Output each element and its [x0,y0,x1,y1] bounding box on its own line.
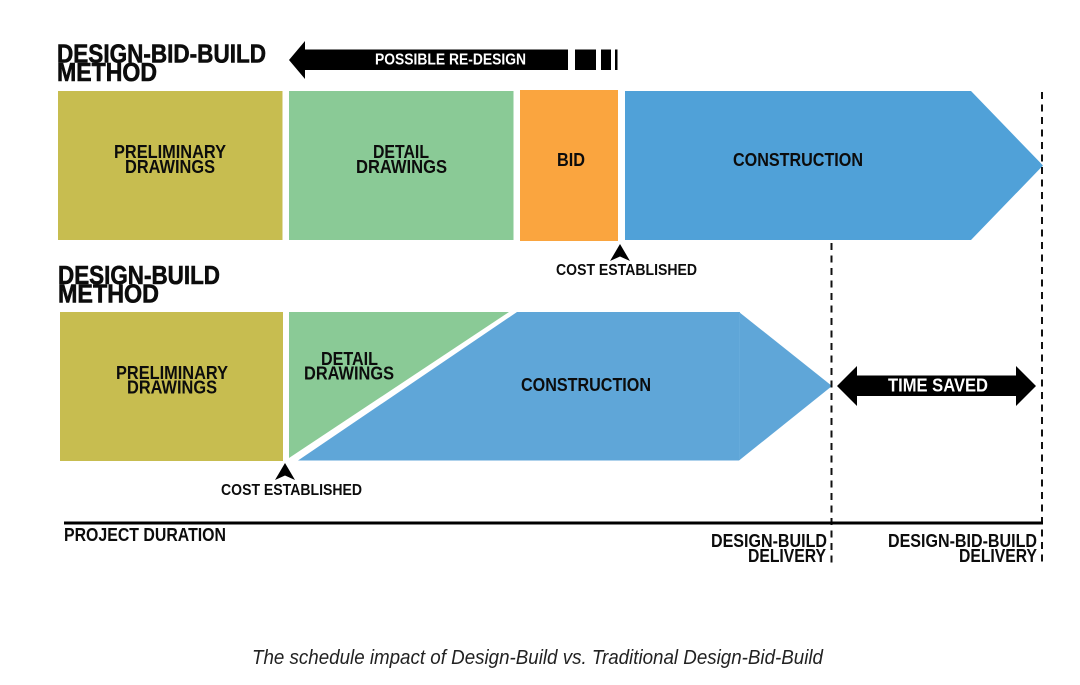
panel: preliminary drawings (design-build): DRAWINGS [127,378,217,398]
dashed line: design-build delivery [830,243,832,567]
arrow: time saved: TIME SAVED [888,376,988,396]
arrow: time saved [837,366,1036,406]
timeline axis [64,522,1043,524]
panel: construction (design-build): CONSTRUCTION [521,375,651,395]
heading: design-build method: DESIGN-BUILD [58,262,220,290]
arrow: possible re-design [289,41,618,79]
label: project duration: PROJECT DURATION [64,525,226,545]
panel: detail drawings (design-bid-build): DETAIL [373,142,429,162]
panel: preliminary drawings (design-build) [60,312,283,461]
label: design-build delivery: DESIGN-BUILD [711,531,827,551]
panel: bid: BID [557,150,585,170]
panel: bid [520,90,618,241]
panel: detail drawings (design-build): DRAWINGS [304,364,394,384]
panel: construction (design-bid-build): CONSTRUCTION [733,150,863,170]
panel: detail drawings (design-bid-build): DRAWINGS [356,157,447,177]
label: design-bid-build delivery: DESIGN-BID-BUILD [888,531,1037,551]
heading: design-bid-build method [57,40,266,87]
arrow: possible re-design: POSSIBLE RE-DESIGN [375,52,526,68]
caption: The schedule impact of Design-Build vs. Traditional Design-Bid-Build [252,647,824,669]
panel: detail drawings (design-build) [289,312,509,458]
heading: design-build method: METHOD [58,280,159,308]
panel: preliminary drawings (design-build): PRELIMINARY [116,363,228,383]
panel: detail drawings (design-build): DETAIL [321,349,378,369]
panel: preliminary drawings (design-bid-build) [58,91,282,240]
dashed line: design-bid-build delivery [1041,92,1043,567]
heading: design-bid-build method: DESIGN-BID-BUILD [57,40,266,68]
marker: cost established (design-bid-build) [556,244,697,279]
panel: construction (design-bid-build) [625,91,1043,240]
marker: cost established (design-build): COST ESTABLISHED [221,482,362,499]
panel: preliminary drawings (design-bid-build): DRAWINGS [125,157,215,177]
label: design-bid-build delivery: DELIVERY [959,546,1037,566]
marker: cost established (design-bid-build): COST ESTABLISHED [556,262,697,279]
marker: cost established (design-build) [221,463,362,499]
panel: detail drawings (design-bid-build) [289,91,514,240]
label: design-build delivery [711,531,827,566]
label: design-build delivery: DELIVERY [748,546,826,566]
heading: design-build method [58,262,220,308]
heading: design-bid-build method: METHOD [57,59,157,87]
panel: preliminary drawings (design-bid-build): PRELIMINARY [114,142,226,162]
panel: construction (design-build) [298,312,832,460]
label: design-bid-build delivery [888,531,1037,566]
